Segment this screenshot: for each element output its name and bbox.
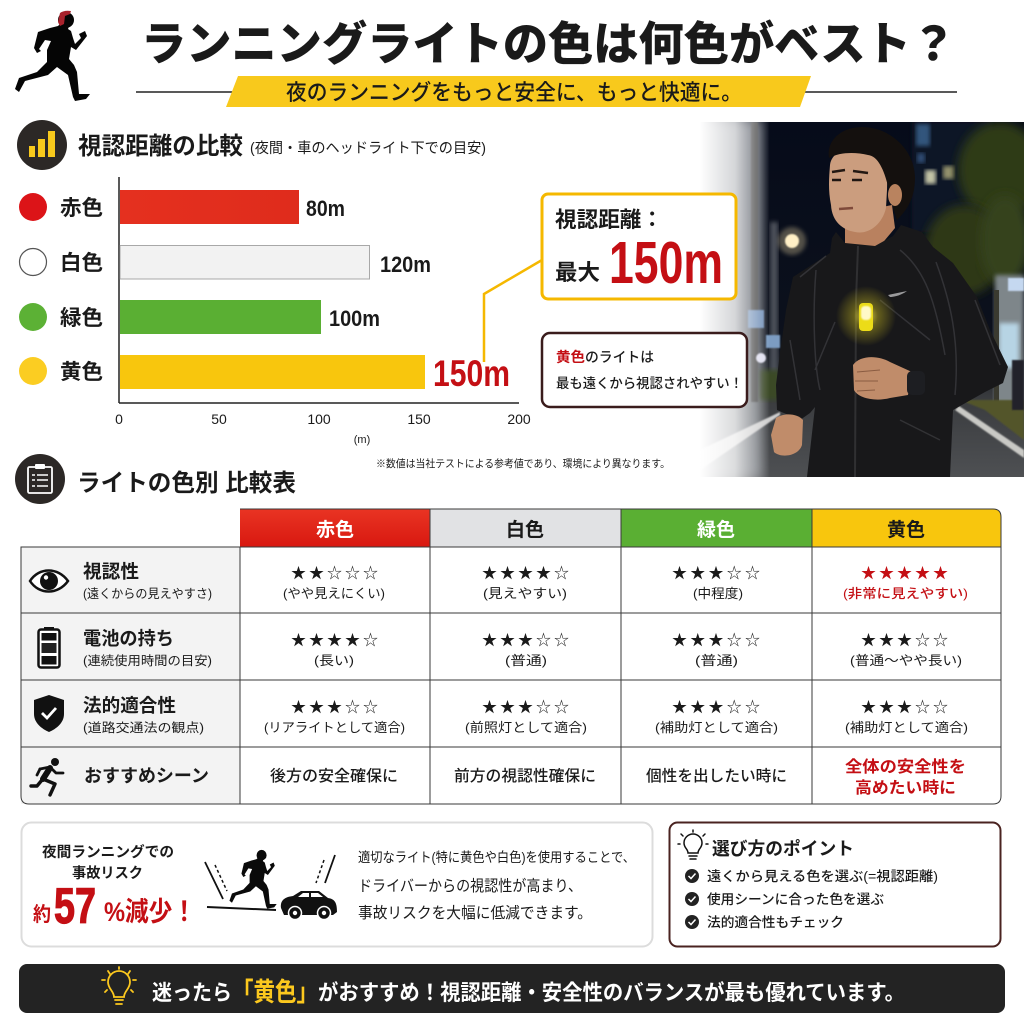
jacket [776,225,1008,477]
banner: recommendation [19,964,1005,1013]
row: battery life: (長い) [314,653,354,668]
callout: max distance: 視認距離： [555,208,663,232]
row: battery life: 電池の持ち [83,628,174,649]
callout: yellow note [542,333,747,407]
illustration: runner and car [205,850,337,920]
panel: accident risk: 適切なライト(特に黄色や白色)を使用することで、 [358,849,635,865]
car [281,891,337,920]
heading: comparison table: ライトの色別 比較表 [77,470,296,497]
chart row: yellow: 黄色 [60,361,103,384]
icon: light bulb [678,830,708,859]
row: battery life: ★★★☆☆ [482,632,569,649]
row: visibility: (中程度) [693,586,743,601]
row: legal compliance: ★★★☆☆ [672,699,760,716]
header: yellow [812,509,1001,547]
header: green [621,509,812,547]
comparison table [21,509,1001,804]
chart row: red [19,190,345,224]
chart row: white [20,246,431,279]
row: recommended scene: 後方の安全確保に [270,767,398,785]
row: battery life: (普通) [695,653,738,668]
callout: yellow note: のライトは [585,349,654,365]
row: recommended scene: 全体の安全性を [845,757,966,776]
face [829,149,887,233]
row: battery life: (普通〜やや長い) [850,653,962,668]
row: battery life: (連続使用時間の目安) [83,653,212,668]
row: visibility: (遠くからの見えやすさ) [83,587,212,601]
chart row: white: 白色 [60,252,103,275]
icon: small runner [31,758,63,795]
row: legal compliance: (リアライトとして適合) [264,720,405,735]
row: battery life: (普通) [505,653,547,668]
row: recommended scene: おすすめシーン [84,766,209,786]
check list: 使用シーンに合った色を選ぶ [707,891,885,907]
icon: eye [30,570,68,592]
row: visibility: (非常に見えやすい) [843,586,968,601]
check list: 遠くから見える色を選ぶ(=視認距離) [707,868,938,884]
stat: 57 percent reduction [33,878,196,934]
row: recommended scene: 個性を出したい時に [646,767,787,785]
axis labels: 100 [307,411,331,427]
icon: runner silhouette with red hair [15,11,90,101]
background: street, poles, trees, lights [700,122,1024,477]
stat: 57 percent reduction: %減少！ [104,897,196,927]
runner figure [229,850,277,909]
subtitle banner: 夜のランニングをもっと安全に、もっと快適に。 [286,80,742,105]
row: visibility: (見えやすい) [483,586,567,601]
row: visibility: (やや見えにくい) [283,586,385,601]
row: recommended scene: 高めたい時に [855,778,956,797]
row: visibility [30,561,968,601]
check list: 法的適合性もチェック [707,914,844,930]
panel: accident risk: 夜間ランニングでの [42,843,174,861]
header: yellow: 黄色 [887,519,925,541]
icon: clipboard badge [15,454,65,504]
callout: yellow note: 黄色 [556,349,585,365]
row: visibility: 視認性 [83,561,139,582]
heading note: (夜間・車のヘッドライト下での目安) [250,140,486,157]
icon: battery [38,627,60,668]
icon: bar chart badge [17,120,67,170]
row: battery life: ★★★★☆ [291,632,378,649]
row: visibility: ★★☆☆☆ [291,565,378,582]
row: recommended scene [31,757,966,797]
chart row: yellow [19,353,510,394]
connector line [484,260,542,362]
row: battery life [38,627,962,668]
panel: selection points: 選び方のポイント [712,838,854,859]
yellow clip light [838,288,894,344]
row: legal compliance: (前照灯として適合) [465,720,587,735]
row: recommended scene: 前方の視認性確保に [454,767,596,785]
axis labels: 0 [115,411,123,427]
header: green: 緑色 [697,519,735,541]
axis labels: 50 [211,411,227,427]
panel: accident risk: ドライバーからの視認性が高まり、 [358,877,582,895]
chart row: green: 100m [329,306,380,331]
row: battery life: ★★★☆☆ [672,632,760,649]
callout: yellow note: 最も遠くから視認されやすい！ [556,376,743,391]
chart row: green [19,300,380,334]
hand and watch [771,357,925,456]
callout: max distance: 最大 [555,260,600,285]
axis labels: 200 [507,411,531,427]
row: legal compliance [34,695,968,735]
chart row: green: 緑色 [60,307,103,330]
banner: recommendation: 迷ったら [152,981,232,1005]
row: legal compliance: ★★★☆☆ [861,699,948,716]
banner: recommendation: 「黄色」 [232,977,318,1007]
icon: yellow bulb [102,967,136,1004]
banner: recommendation: がおすすめ！視認距離・安全性のバランスが最も優れています。 [318,980,905,1005]
title: ランニングライトの色は何色がベスト？ [141,18,956,70]
row: visibility: ★★★★★ [861,565,948,582]
chart row: red: 80m [306,196,345,221]
hair [829,127,915,220]
check list [685,868,938,930]
callout: max distance [542,194,736,299]
chart row: yellow: 150m [433,353,510,394]
axis labels: 150 [407,411,431,427]
row: legal compliance: ★★★☆☆ [482,699,569,716]
row: legal compliance: (補助灯として適合) [655,720,778,735]
row: legal compliance: ★★★☆☆ [291,699,378,716]
heading: visibility distance: 視認距離の比較 [78,133,243,160]
header: red [240,509,430,547]
header: white [430,509,621,547]
footnote: ※数値は当社テストによる参考値であり、環境により異なります。 [376,457,670,470]
photo: runner at night wearing yellow light [700,122,1024,477]
panel: selection points [670,822,1000,946]
row: legal compliance: (補助灯として適合) [845,720,968,735]
row: battery life: ★★★☆☆ [861,632,948,649]
icon: shield [34,695,64,732]
chart row: red: 赤色 [60,197,103,220]
stat: 57 percent reduction: 約 [33,903,51,926]
panel: accident risk: 事故リスク [72,864,143,882]
row: legal compliance: (道路交通法の観点) [83,720,204,735]
header: red: 赤色 [316,519,354,541]
row: visibility: ★★★★☆ [482,565,569,582]
callout: max distance: 150m [609,230,723,296]
subtitle banner [136,76,957,107]
chart row: white: 120m [380,252,431,277]
stat: 57 percent reduction: 57 [54,878,96,934]
bar chart [19,177,531,446]
axis labels [115,411,531,446]
neck [845,205,895,248]
fade to white on the left [700,122,770,477]
row: legal compliance: 法的適合性 [83,695,176,716]
row: visibility: ★★★☆☆ [672,565,760,582]
header: white: 白色 [506,519,544,541]
panel: accident risk: 事故リスクを大幅に低減できます。 [358,904,592,922]
axis labels: (m) [354,434,370,446]
table left column background [21,547,240,804]
panel: accident risk [22,822,652,946]
